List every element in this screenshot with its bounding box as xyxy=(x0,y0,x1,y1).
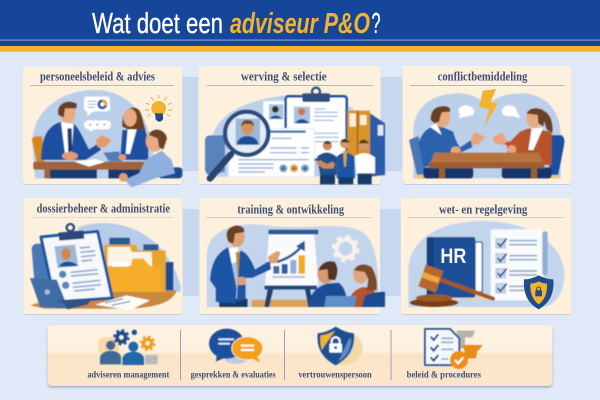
label: gesprekken & evaluaties: gesprekken & evaluaties xyxy=(191,370,276,380)
icon: shield with padlock xyxy=(317,327,363,365)
item: adviseren management xyxy=(87,330,170,380)
illustration: recruitment xyxy=(205,88,385,184)
illustration: trainer at flip chart xyxy=(207,224,385,307)
illustration: files and laptop xyxy=(30,223,181,310)
icon: speech bubbles xyxy=(209,329,263,364)
title xyxy=(92,8,380,40)
title: ? xyxy=(372,8,380,40)
illustration: law book, gavel, checklist xyxy=(408,221,564,307)
heading: conflictbemiddeling: conflictbemiddeling xyxy=(438,70,528,84)
heading: dossierbeheer & administratie: dossierbeheer & administratie xyxy=(37,202,170,216)
heading: personeelsbeleid & advies: personeelsbeleid & advies xyxy=(40,70,155,84)
heading: wet- en regelgeving: wet- en regelgeving xyxy=(439,203,528,217)
icon: shield with lock xyxy=(524,275,553,309)
icon: lightning bolt xyxy=(479,89,498,127)
item: vertrouwenspersoon xyxy=(298,327,372,380)
title: adviseur P&O xyxy=(230,8,370,40)
icon: checklist with badge xyxy=(425,329,482,369)
heading: werving & selectie: werving & selectie xyxy=(241,70,327,84)
icon: people with gears xyxy=(98,330,158,365)
panel: training & ontwikkeling xyxy=(199,198,385,314)
panel: dossierbeheer & administratie xyxy=(23,198,183,314)
label: adviseren management: adviseren management xyxy=(87,370,170,380)
label: vertrouwenspersoon: vertrouwenspersoon xyxy=(298,370,372,380)
panel: personeelsbeleid & advies xyxy=(23,67,182,187)
bottom bar xyxy=(48,325,552,386)
panel: wet- en regelgeving xyxy=(401,198,572,314)
icon: light bulb xyxy=(146,95,172,122)
label: beleid & procedures: beleid & procedures xyxy=(407,370,481,380)
illustration: meeting xyxy=(32,90,182,187)
title: Wat doet een xyxy=(92,8,223,40)
header banner xyxy=(0,0,600,52)
panel: conflictbemiddeling xyxy=(402,66,572,184)
connecting bands xyxy=(180,77,406,296)
illustration: conflict conversation xyxy=(409,93,564,178)
panel: werving & selectie xyxy=(198,66,385,184)
dividers xyxy=(180,330,391,380)
heading: training & ontwikkeling: training & ontwikkeling xyxy=(237,202,345,216)
label: HR: HR xyxy=(440,244,466,268)
item: gesprekken & evaluaties xyxy=(191,329,276,380)
item: beleid & procedures xyxy=(407,329,482,380)
